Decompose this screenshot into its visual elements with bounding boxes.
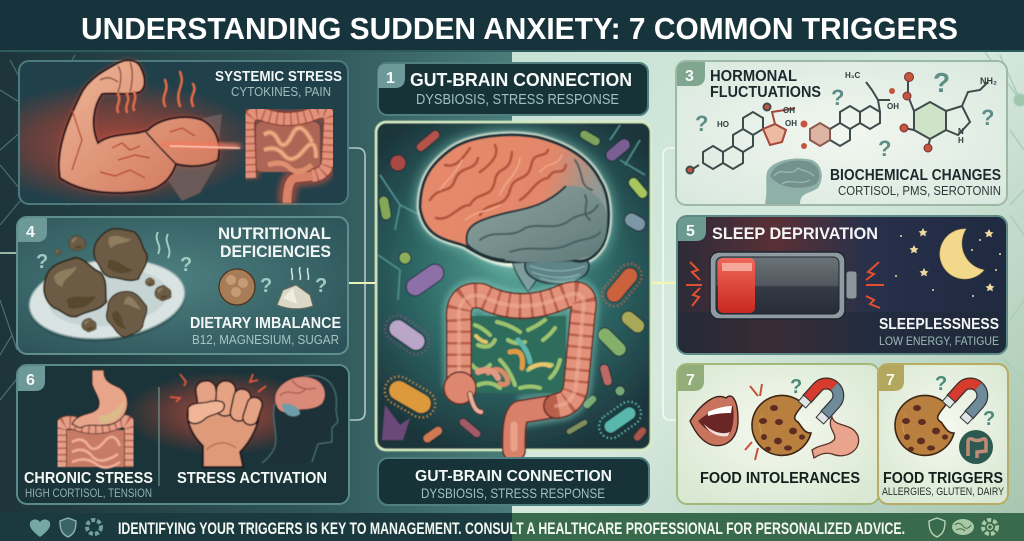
- neural network decoration right: [985, 52, 1024, 380]
- icon: open mouth: [690, 396, 738, 446]
- badge 1: 1: [386, 70, 395, 87]
- decorative question marks and steam: [36, 232, 327, 297]
- icon: crescent moon: [940, 229, 984, 279]
- neural network decoration left: [0, 55, 95, 400]
- badge 6: 6: [26, 372, 35, 389]
- question marks: ?: [878, 136, 891, 161]
- question mark and sparks: ?: [790, 376, 802, 398]
- heading line 2: DEFICIENCIES: [220, 242, 331, 261]
- question marks: [935, 373, 995, 430]
- chemical labels: H₃C: [845, 71, 860, 80]
- icon: flexed arm: [59, 60, 240, 201]
- icon: colon with gut microbes: [444, 294, 584, 450]
- icon: shield: [60, 518, 76, 537]
- chemical labels: HO: [717, 120, 729, 129]
- icon: head with brain: [765, 158, 822, 204]
- chemical labels: OH: [887, 102, 899, 111]
- icon: magnet: [942, 375, 991, 424]
- icon: plate with rocks: [24, 218, 190, 349]
- panel: gut-brain header: [378, 63, 648, 115]
- subheading: BIOCHEMICAL CHANGES: [830, 167, 1001, 184]
- title: UNDERSTANDING SUDDEN ANXIETY: 7 COMMON TRIGGERS: [81, 11, 958, 46]
- question marks: ?: [935, 373, 947, 395]
- decorative question marks and steam: ?: [36, 251, 48, 273]
- heading: GUT-BRAIN CONNECTION: [410, 70, 632, 90]
- heading: FOOD TRIGGERS: [883, 470, 1003, 487]
- icon: brain: [420, 135, 609, 292]
- subheading: CYTOKINES, PAIN: [231, 84, 331, 99]
- badge 5: 5: [686, 223, 695, 240]
- heading: SYSTEMIC STRESS: [215, 68, 342, 85]
- heading: HORMONAL: [710, 68, 797, 85]
- subheading: DIETARY IMBALANCE: [190, 315, 341, 332]
- panel: hormonal fluctuations: [676, 61, 1007, 205]
- bacteria: [378, 129, 650, 445]
- question marks: ?: [695, 111, 708, 136]
- background: right light half: [512, 0, 1024, 541]
- icon: colon: [248, 112, 330, 203]
- badge 7: 7: [886, 372, 895, 389]
- badge 1: [378, 64, 405, 88]
- subheading: SLEEPLESSNESS: [879, 316, 999, 333]
- panel: gut-brain footer label: [378, 458, 649, 505]
- decorative question marks and steam: ?: [180, 254, 192, 276]
- neural branches: [378, 125, 645, 300]
- panel: food intolerances: [677, 364, 879, 504]
- chemical labels: NH₂: [980, 76, 997, 86]
- chemical labels: H: [958, 136, 964, 145]
- icon: cookie: [895, 395, 954, 455]
- icon: cookie: [752, 395, 811, 455]
- question marks: ?: [983, 408, 995, 430]
- heading: SLEEP DEPRIVATION: [712, 224, 878, 243]
- panel: gut-brain illustration: [376, 122, 651, 450]
- badge 3: 3: [685, 68, 694, 85]
- chemical labels: OH: [785, 119, 797, 128]
- badge 6: [18, 366, 45, 391]
- decorative question marks and steam: ?: [315, 275, 327, 297]
- molecule middle: [800, 82, 895, 149]
- panel: systemic stress: [19, 60, 348, 204]
- badge 7: 7: [686, 372, 695, 389]
- badge 5: [678, 217, 706, 241]
- panel: food triggers: [878, 364, 1008, 504]
- icon: low battery: [686, 252, 884, 319]
- detail text: LOW ENERGY, FATIGUE: [879, 334, 999, 348]
- icon: brain right: [952, 519, 974, 535]
- icon: stomach: [812, 417, 859, 458]
- heading: NUTRITIONAL: [218, 224, 331, 243]
- heading: FOOD INTOLERANCES: [700, 470, 860, 487]
- icon: shield right: [929, 518, 945, 537]
- chemical labels: OH: [783, 106, 795, 115]
- connector lines: [0, 148, 676, 420]
- badge 3: [677, 62, 705, 86]
- question mark and sparks: [745, 376, 802, 460]
- background: left dark half: [0, 0, 512, 541]
- badge 7: [678, 365, 704, 391]
- title bar: [0, 0, 1024, 52]
- chemical labels: [717, 71, 997, 145]
- icon: clenched fist: [170, 374, 266, 467]
- badge 4: [18, 218, 47, 242]
- icon: gear: [87, 520, 101, 534]
- question marks: ?: [831, 85, 844, 110]
- stomach and intestine illustration: [60, 370, 131, 468]
- badge 4: 4: [26, 224, 35, 241]
- heading line 2: FLUCTUATIONS: [710, 84, 821, 101]
- divider: [158, 387, 160, 486]
- decorative question marks and steam: ?: [260, 275, 272, 297]
- panel: nutritional deficiencies: [17, 217, 348, 354]
- detail text: CORTISOL, PMS, SEROTONIN: [838, 183, 1001, 198]
- heading: GUT-BRAIN CONNECTION: [415, 468, 612, 485]
- icon: magnet: [798, 375, 847, 424]
- icon: heart: [30, 519, 50, 537]
- question marks: ?: [933, 67, 950, 98]
- chemical labels: N: [958, 127, 964, 136]
- question marks: ?: [981, 105, 994, 130]
- detail text: B12, MAGNESIUM, SUGAR: [192, 332, 339, 347]
- subheading: chronic stress: HIGH CORTISOL, TENSION: [25, 486, 152, 500]
- panel: chronic stress: [17, 365, 349, 504]
- footer bar: [0, 513, 1024, 541]
- panel: sleep deprivation: [677, 216, 1007, 354]
- stars: [895, 228, 1001, 297]
- icon: gut badge: [959, 430, 993, 464]
- heading: stress activation: STRESS ACTIVATION: [177, 470, 327, 487]
- question marks: [695, 67, 994, 161]
- molecule left: [686, 104, 795, 174]
- molecule right: [900, 72, 988, 152]
- subheading: DYSBIOSIS, STRESS RESPONSE: [421, 485, 605, 501]
- icon: gear right: [983, 520, 997, 534]
- icon: head silhouette with brain: [262, 375, 338, 463]
- subheading: DYSBIOSIS, STRESS RESPONSE: [416, 92, 619, 108]
- icon: food chunks: [219, 269, 313, 309]
- heading: chronic stress: CHRONIC STRESS: [24, 470, 153, 487]
